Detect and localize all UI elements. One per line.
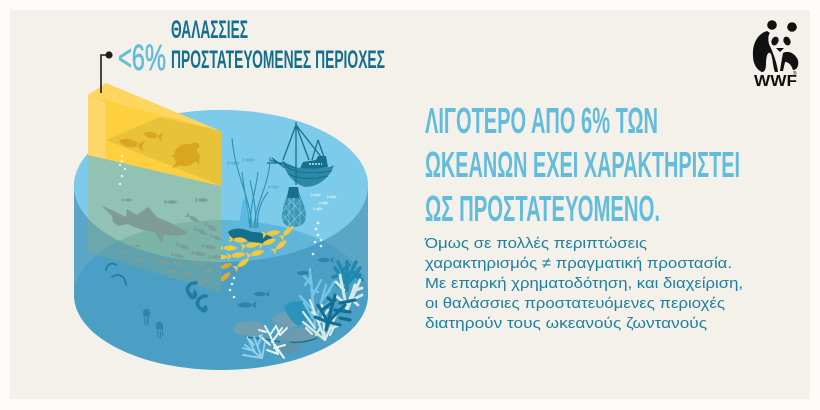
body text: Με επαρκή χρηματοδότηση, και διαχείριση,: [425, 275, 743, 292]
light fish near surface: [227, 157, 337, 211]
flag pointer: [101, 51, 113, 93]
coral: small light blue: [243, 335, 265, 358]
protected zone surface tint: [88, 155, 221, 262]
seaweed light stalk: [240, 198, 248, 228]
coral: cream lower: [303, 300, 340, 340]
sea floor: [74, 220, 368, 370]
bubbles: [119, 154, 322, 298]
sea floor seen through surface: [120, 220, 322, 262]
heading: marine protected areas: [171, 16, 385, 74]
cylinder body: [74, 110, 368, 370]
ocean cylinder: [74, 110, 368, 370]
teal fish on sea floor: [237, 257, 334, 309]
heading: marine protected areas: ΘΑΛΑΣΣΙΕΣ: [171, 16, 248, 44]
coral: dark teal: [315, 295, 355, 330]
icon: turtle: [171, 141, 201, 169]
panda ears: [767, 20, 777, 30]
coral reef: [243, 262, 362, 358]
coral: top blue: [333, 262, 362, 290]
coral: blue mound: [284, 301, 312, 326]
school of grey fish: [120, 197, 222, 285]
WWF wordmark: WWF: [754, 73, 797, 90]
body text: [424, 235, 743, 332]
WWF panda logo: [753, 20, 798, 90]
icon: fishing boat with net: [267, 122, 334, 227]
panda eyes and nose: [770, 35, 780, 47]
reef rocks: [233, 312, 317, 353]
rock under net: [228, 229, 272, 244]
protected zone yellow block: [88, 83, 221, 186]
body text: οι θαλάσσιες προστατευόμενες περιοχές: [425, 295, 725, 312]
icon: shark: [101, 205, 188, 244]
fishing net: [282, 187, 306, 227]
fish in yellow zone: [118, 129, 163, 152]
protected zone underwater tint: [88, 155, 221, 293]
seaweed: [232, 138, 270, 228]
body text: διατηρούν τους ωκεανούς ζωντανούς: [425, 315, 707, 332]
icon: jellyfish: [143, 308, 163, 339]
school of yellow fish: [221, 226, 294, 282]
registered mark: ®: [793, 70, 797, 77]
heading: marine protected areas: ΠΡΟΣΤΑΤΕΥΟΜΕΝΕΣ ΠΕΡΙΟΧΕΣ: [171, 46, 385, 74]
water surface: [74, 110, 368, 262]
body text: Όμως σε πολλές περιπτώσεις: [424, 235, 647, 252]
main headline: [425, 100, 740, 229]
body text: χαρακτηρισμός ≠ πραγματική προστασία.: [425, 255, 732, 272]
coral: cream right: [335, 275, 362, 310]
coral: small white: [259, 326, 287, 358]
callout: less than 6%: <6%: [118, 37, 166, 78]
panda body: [753, 31, 778, 72]
icon: shrimps and seahorses: [106, 264, 206, 311]
coral: light blue fan: [300, 269, 334, 325]
